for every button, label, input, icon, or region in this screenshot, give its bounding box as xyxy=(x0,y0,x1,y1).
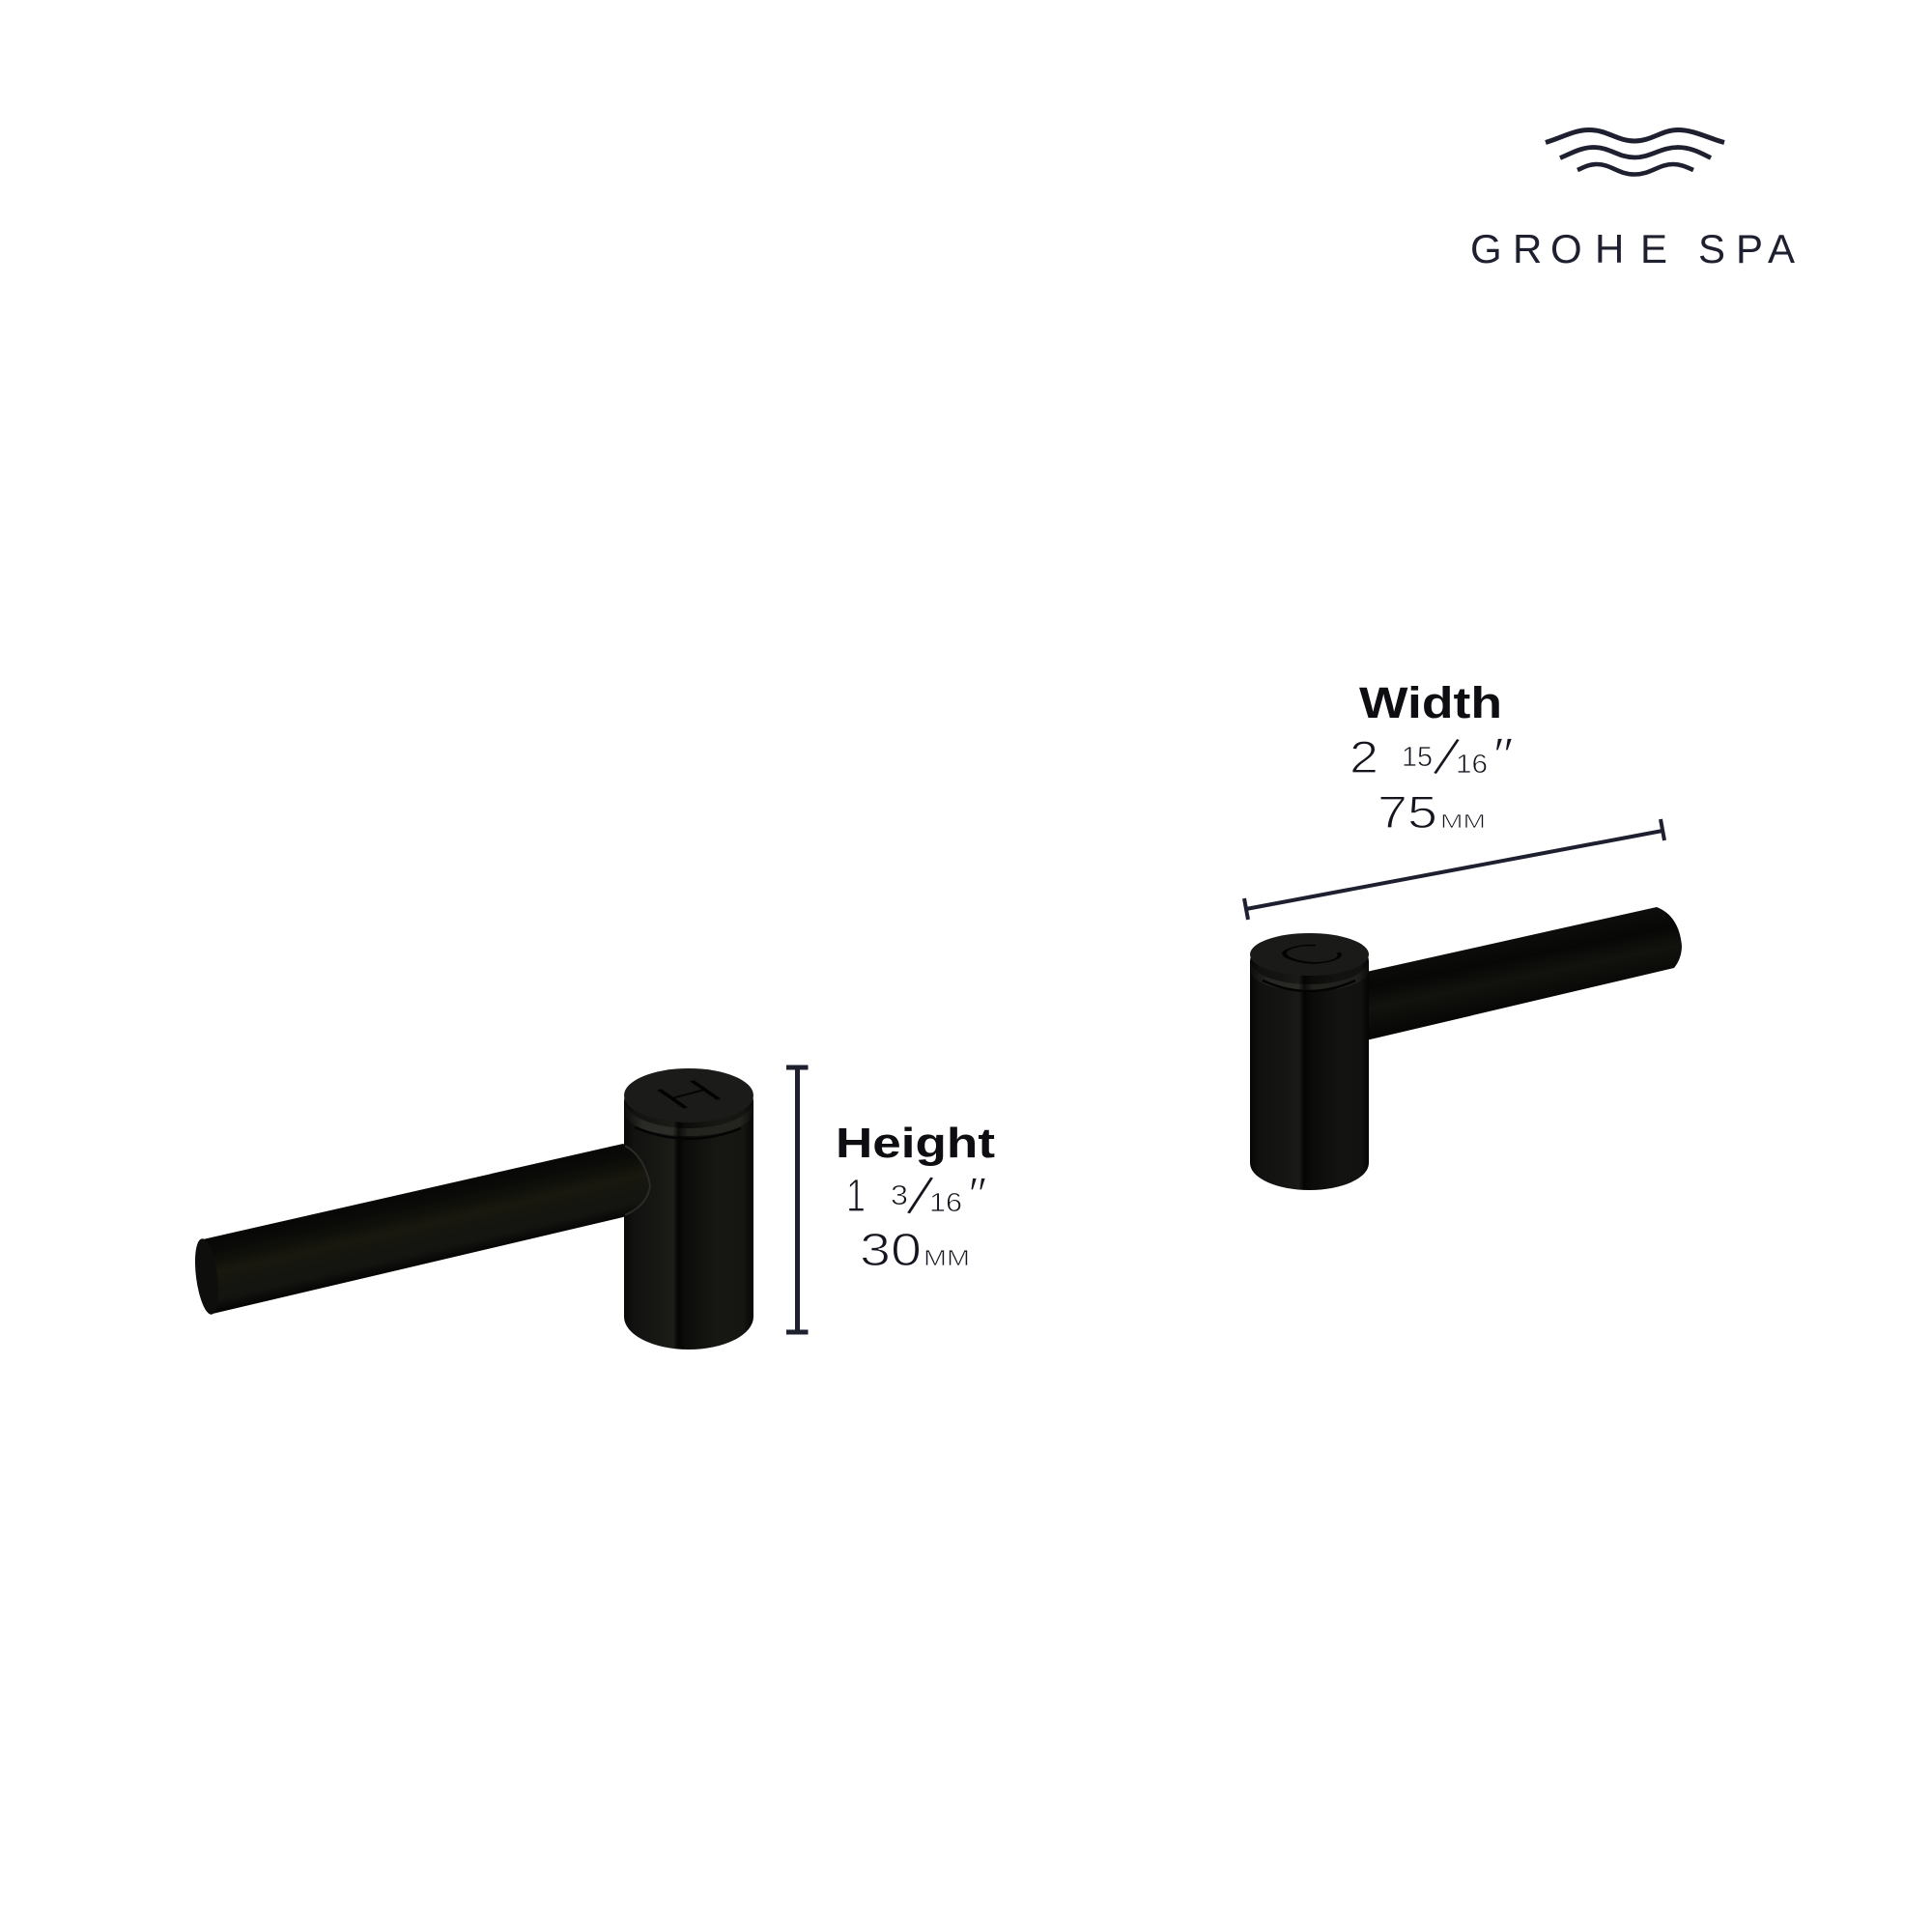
heading: Height: Height xyxy=(836,1120,995,1167)
rim band xyxy=(625,1101,753,1136)
value: 75 mm: 75 xyxy=(1378,786,1437,838)
lever end cap xyxy=(191,1237,222,1316)
logo: Grohe Spa xyxy=(1470,129,1795,271)
product: left lever handle (H) xyxy=(191,1068,753,1350)
value: 2 15/16 inches: 15 xyxy=(1402,742,1433,773)
arrow: width dimension line xyxy=(1244,819,1664,920)
value: 30 mm: 30 xyxy=(860,1225,922,1276)
label: height dimension xyxy=(836,1120,995,1276)
label: width dimension xyxy=(1350,678,1514,838)
value: 1 3/16 inches: ″ xyxy=(966,1168,986,1222)
value: 2 15/16 inches: 2 xyxy=(1350,731,1378,782)
value: 1 3/16 inches: / xyxy=(902,1163,938,1230)
value: 2 15/16 inches: / xyxy=(1429,725,1464,790)
top disc xyxy=(624,1068,753,1122)
value: 1 3/16 inches xyxy=(846,1163,986,1230)
rim band xyxy=(1251,961,1368,991)
cylinder body xyxy=(624,1069,753,1350)
value: 1 3/16 inches: 16 xyxy=(929,1187,962,1217)
logo wordmark: GROHE SPA xyxy=(1470,226,1795,271)
heading: Width: Width xyxy=(1359,678,1502,727)
value: 2 15/16 inches: ″ xyxy=(1491,728,1514,782)
value: 75 mm: MM xyxy=(1440,811,1486,833)
value: 2 15/16 inches xyxy=(1350,725,1514,790)
arrow: height dimension line xyxy=(786,1067,808,1332)
value: 1 3/16 inches: 3 xyxy=(891,1180,908,1211)
engraved C: C xyxy=(1254,936,1369,973)
cylinder body xyxy=(1250,934,1369,1190)
product: right lever handle (C) xyxy=(1250,907,1682,1190)
lever junction highlight xyxy=(625,1146,650,1215)
lever arm xyxy=(203,1144,650,1314)
value: 30 mm: MM xyxy=(923,1245,970,1270)
value: 75 mm xyxy=(1378,786,1486,838)
top disc xyxy=(1250,933,1369,976)
lever arm xyxy=(1362,907,1682,1041)
icon: three waves xyxy=(1546,129,1724,174)
value: 2 15/16 inches: 16 xyxy=(1456,749,1488,779)
engraved H: H xyxy=(640,1072,737,1117)
value: 30 mm xyxy=(860,1225,970,1276)
value: 1 3/16 inches: 1 xyxy=(846,1171,866,1222)
